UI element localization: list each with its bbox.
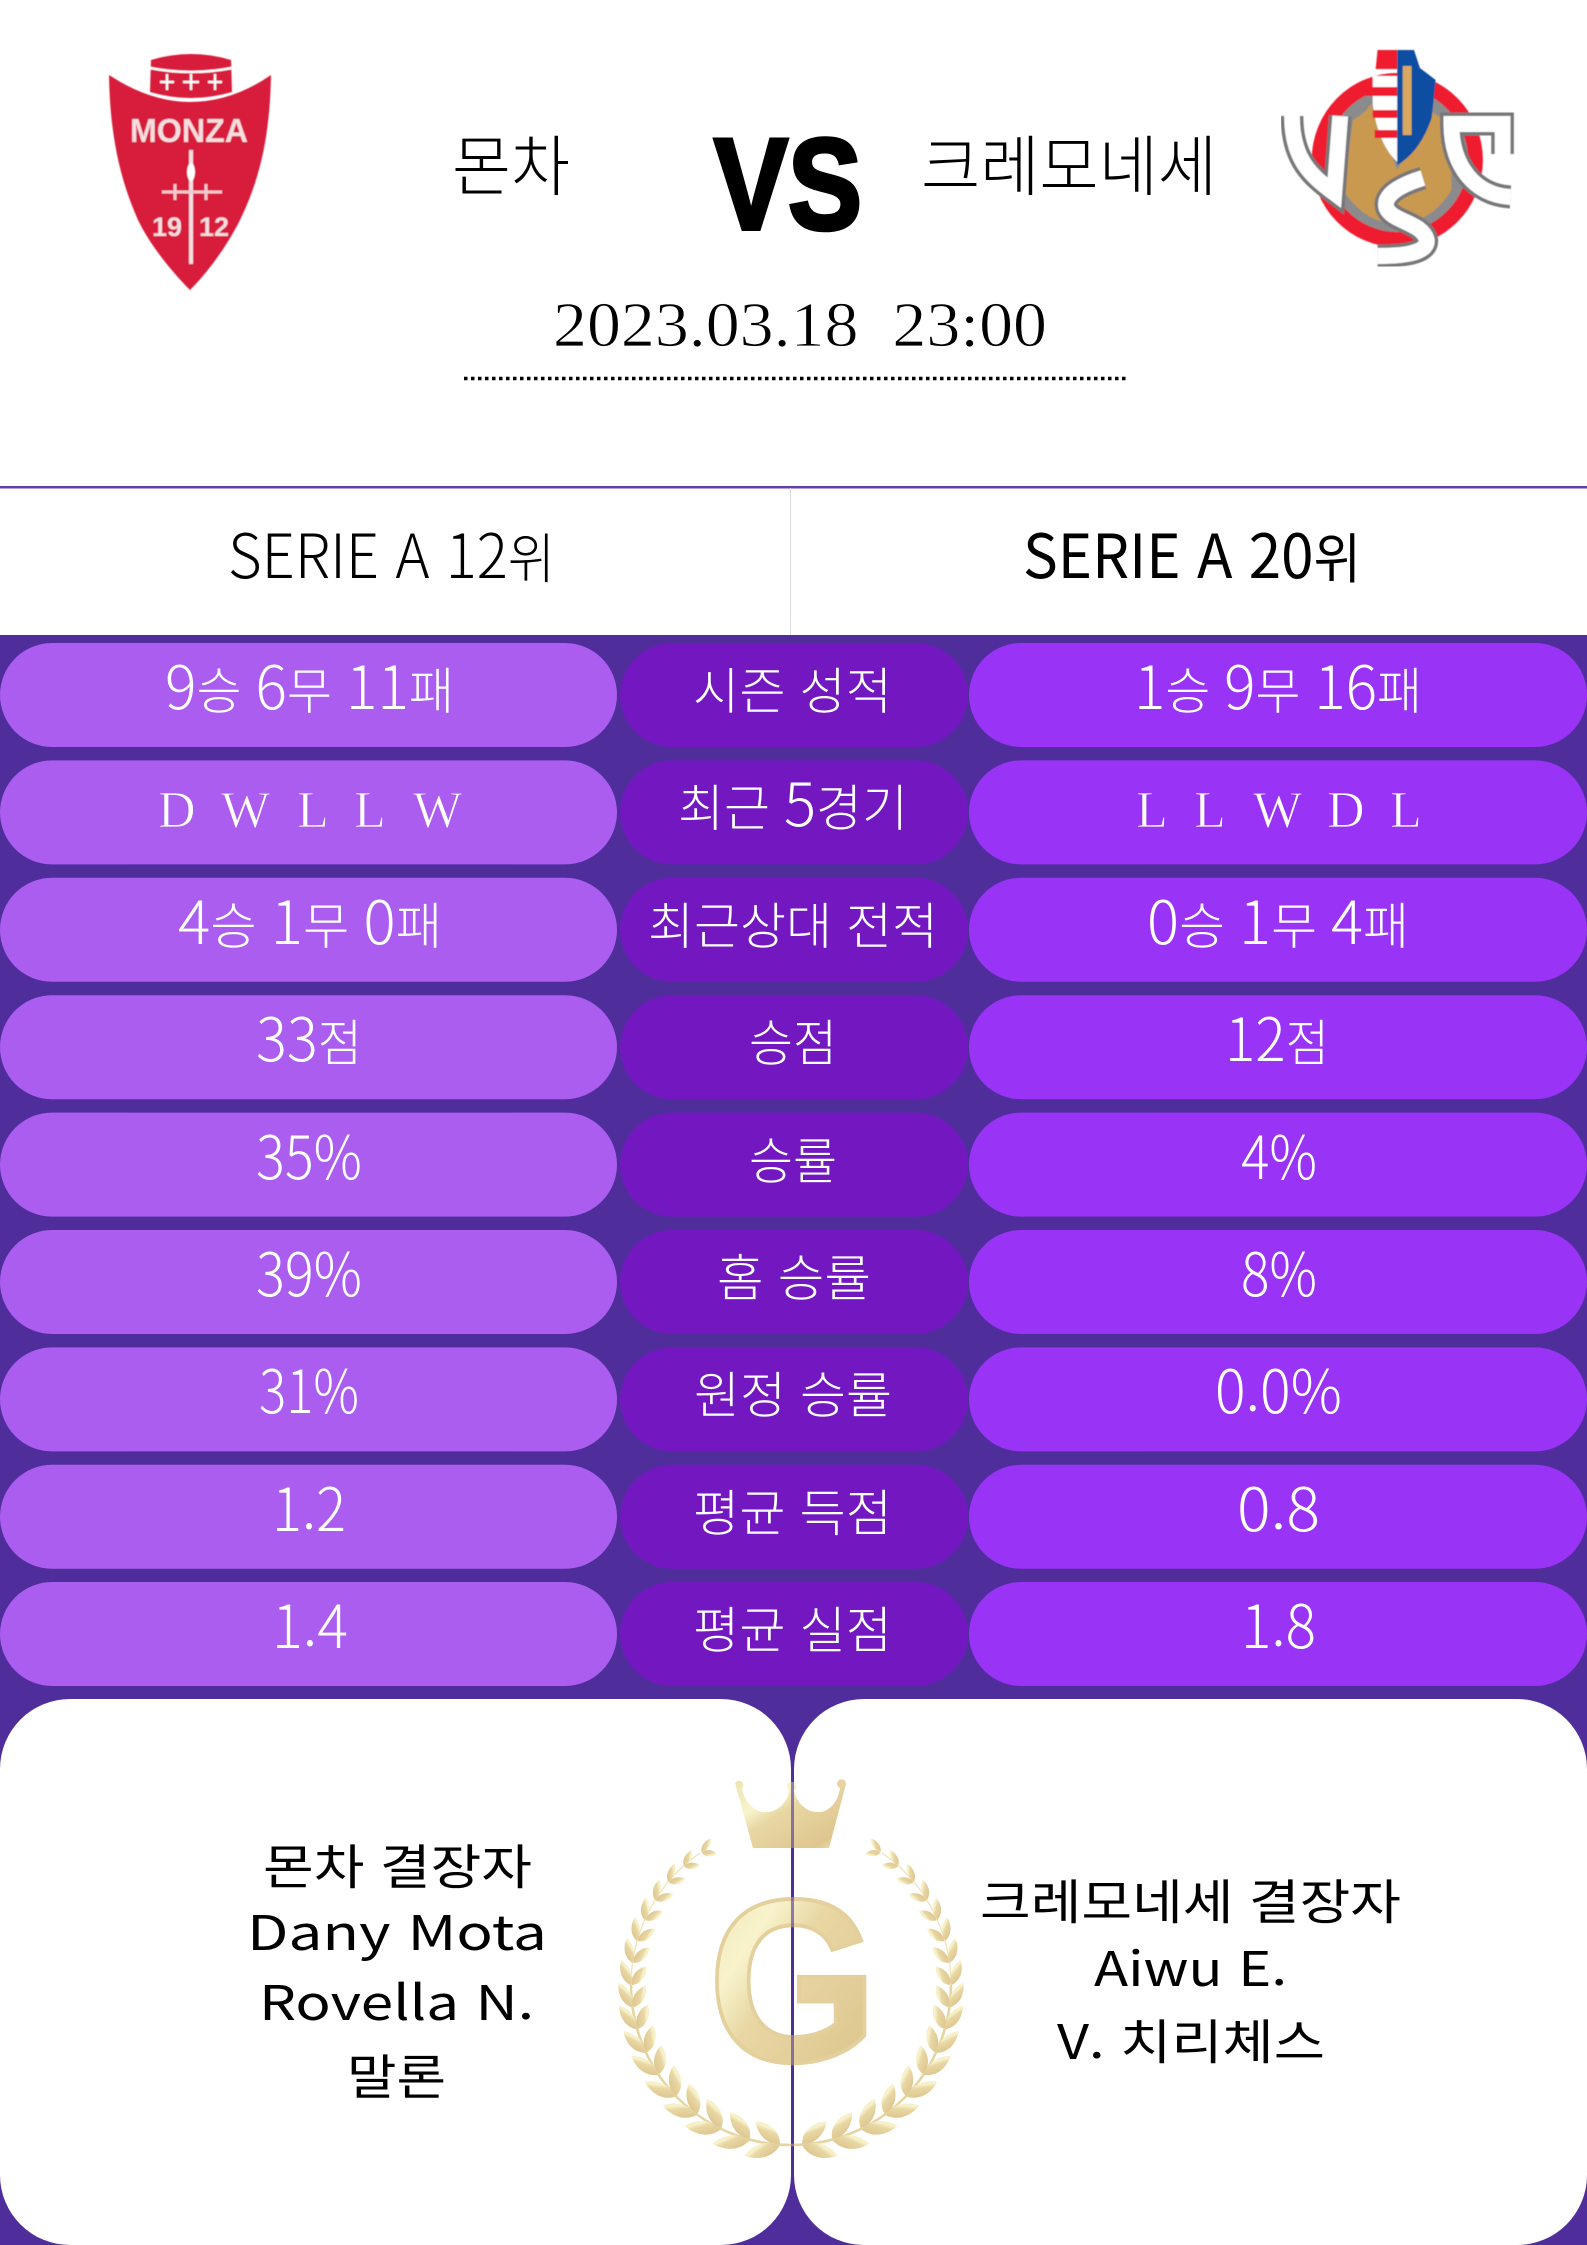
stat row: away win rate: 31%: [259, 1344, 359, 1431]
heading: home team name: 몬차: [452, 114, 570, 210]
stat row: head to head: 0승 1무 4패: [1147, 875, 1409, 962]
icon: Monza crest: [109, 54, 271, 290]
away absent player: Aiwu E.: [1094, 1930, 1287, 2000]
home absent player: Rovella N.: [259, 1964, 534, 2034]
stat row: season record: 9승 6무 11패: [165, 640, 454, 727]
stat row: home win rate: [0, 1227, 1587, 1334]
stat row: away win rate: 0.0%: [1215, 1344, 1342, 1431]
stat row: average goals scored: [0, 1462, 1587, 1569]
stat row: season record: 1승 9무 16패: [1134, 640, 1422, 727]
stat row: win rate: 승률: [749, 1122, 837, 1194]
icon: Cremonese crest: [1292, 50, 1510, 256]
heading: VS: VS: [714, 111, 862, 257]
stat row: last five matches: LLWDL: [1136, 782, 1422, 839]
away league rank: SERIE A 20위: [1023, 507, 1361, 596]
stat row: season record: [0, 640, 1587, 747]
home absent player: 말론: [347, 2038, 446, 2108]
stat row: points: 승점: [749, 1004, 837, 1076]
stat row: last five matches: DWLLW: [158, 782, 462, 839]
stat row: home win rate: 39%: [256, 1227, 362, 1314]
stat row: points: 33점: [256, 992, 362, 1079]
stat row: head to head: [0, 875, 1587, 982]
panel: home absences: [0, 1699, 791, 2245]
stat row: last five matches: 최근 5경기: [678, 757, 908, 844]
stat row: last five matches: [0, 757, 1587, 864]
away absent player: V. 치리체스: [1057, 2003, 1325, 2073]
stat row: average goals scored: 0.8: [1237, 1462, 1320, 1549]
stat row: average goals conceded: 1.8: [1241, 1579, 1316, 1666]
centre divider over emblem: [791, 1760, 794, 2160]
panel: league rank row: [0, 486, 1587, 635]
icon: gold crown and laurel emblem: [614, 1779, 968, 2165]
home absences heading: 몬차 결장자: [263, 1828, 532, 1898]
stat row: home win rate: 8%: [1241, 1227, 1317, 1314]
stat row: points: [0, 992, 1587, 1099]
panel: stats background: [0, 635, 1587, 2245]
stat row: home win rate: 홈 승률: [717, 1239, 871, 1311]
stat row: average goals scored: 평균 득점: [693, 1474, 892, 1546]
stat row: average goals scored: 1.2: [272, 1462, 346, 1549]
home league rank: SERIE A 12위: [228, 507, 555, 596]
stat row: points: 12점: [1225, 992, 1329, 1079]
stat row: away win rate: [0, 1344, 1587, 1451]
stat row: win rate: [0, 1110, 1587, 1217]
stat row: away win rate: 원정 승률: [694, 1356, 892, 1428]
stat row: win rate: 4%: [1241, 1110, 1317, 1197]
dotted underline: [464, 377, 1126, 380]
stat row: head to head: 최근상대 전적: [648, 887, 938, 959]
stat row: average goals conceded: 1.4: [272, 1579, 348, 1666]
icon: Monza crest: MONZA: [130, 112, 248, 149]
stat row: average goals conceded: [0, 1579, 1587, 1686]
panel: away absences: [794, 1699, 1587, 2245]
icon: gold crown and laurel emblem: G: [708, 1852, 878, 2111]
away absences heading: 크레모네세 결장자: [980, 1863, 1401, 1933]
stat row: average goals conceded: 평균 실점: [693, 1591, 892, 1663]
stat row: win rate: 35%: [256, 1110, 362, 1197]
heading: away team name: 크레모네세: [921, 114, 1217, 210]
home absent player: Dany Mota: [247, 1894, 547, 1964]
icon: Monza crest: 19: [152, 212, 182, 242]
match date and time: 2023.03.18 23:00: [553, 289, 1047, 360]
stat row: head to head: 4승 1무 0패: [178, 875, 442, 962]
stat row: season record: 시즌 성적: [693, 652, 892, 724]
icon: Monza crest: 12: [199, 212, 229, 242]
